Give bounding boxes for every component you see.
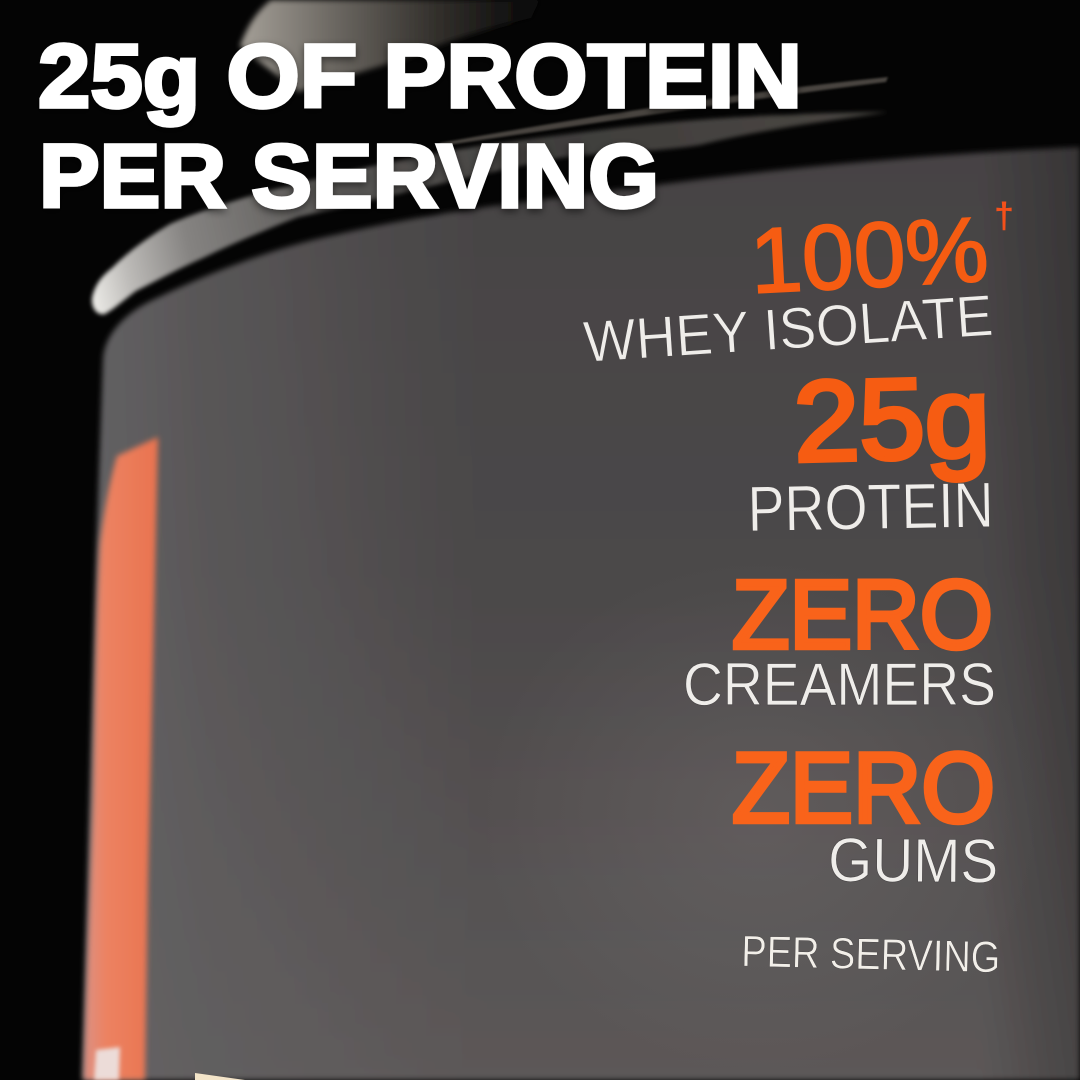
claim: 100% whey isolate: 100% <box>748 199 991 313</box>
per serving note: PER SERVING <box>741 927 1001 982</box>
jar lid: lower rim highlight <box>92 112 888 314</box>
claim: zero gums: ZERO <box>732 732 995 843</box>
claim: zero creamers <box>683 560 996 718</box>
claim: zero gums <box>732 732 998 896</box>
headline: 25g OF PROTEIN <box>38 27 802 127</box>
jar lid: thin upper sliver <box>440 77 888 146</box>
headline: PER SERVING <box>39 127 659 227</box>
claim: zero gums: GUMS <box>828 826 998 896</box>
label claims <box>582 195 1014 982</box>
jar lid: upper highlight <box>240 0 540 92</box>
claim: zero creamers: CREAMERS <box>683 651 996 718</box>
orange label stripe <box>84 437 158 1080</box>
headline <box>38 27 802 227</box>
jar label surface <box>82 147 1080 1080</box>
claim: 25g protein: PROTEIN <box>747 469 994 545</box>
cream mark at bottom edge <box>195 1073 245 1080</box>
claim: 100% whey isolate: WHEY ISOLATE <box>582 283 995 375</box>
claim: 25g protein: 25g <box>792 354 992 486</box>
claim: 25g protein <box>747 354 994 545</box>
claim: 100% whey isolate: † <box>994 195 1014 236</box>
claim: zero creamers: ZERO <box>732 560 993 669</box>
white mark at bottom of stripe <box>94 1047 120 1080</box>
claim: 100% whey isolate <box>582 195 1014 375</box>
